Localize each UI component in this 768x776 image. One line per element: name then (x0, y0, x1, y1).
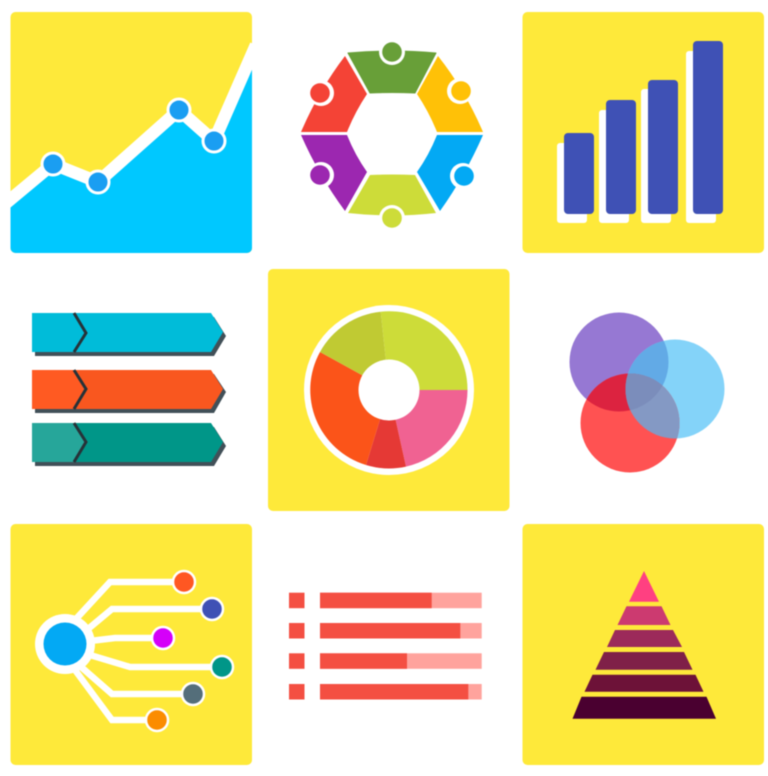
row 3 (289, 653, 482, 669)
overlap: purple and blue (628, 340, 669, 386)
circle: purple (570, 312, 668, 412)
donut slice: olive (320, 312, 389, 390)
panel: donut chart (268, 269, 510, 511)
panel: line and area chart (5, 12, 256, 258)
overlap: all three (626, 374, 662, 410)
panel: three overlapping circles (570, 312, 724, 472)
banner: teal (32, 423, 226, 466)
banner: orange (32, 370, 226, 413)
segment: purple (301, 135, 367, 211)
segment: blue (417, 135, 483, 211)
donut slice: pink (389, 390, 468, 467)
network hub (35, 614, 95, 674)
panel: bar chart (522, 12, 764, 253)
blue area under the line (10, 70, 253, 254)
pyramid layer 2 (618, 606, 670, 625)
segment: green (348, 39, 436, 93)
segment: lime (348, 174, 436, 231)
segment: red (301, 56, 367, 132)
panel: arrow banners (32, 313, 226, 466)
white trend line (5, 45, 256, 204)
network connector lines (75, 582, 222, 720)
network nodes (146, 571, 233, 731)
segment: amber (417, 56, 483, 132)
donut outer ring (304, 305, 474, 475)
panel: hexagonal ring of six segments (301, 39, 483, 231)
donut hole (358, 360, 420, 420)
pyramid layer 1 (629, 571, 659, 602)
row 2 (289, 623, 482, 638)
bar shadows (557, 51, 716, 223)
overlap: blue and red (626, 380, 680, 440)
pyramid layer 3 (607, 630, 682, 647)
donut slice: orange (310, 352, 389, 465)
blue bars (564, 41, 723, 214)
circle: red (580, 374, 680, 472)
row 4 (289, 684, 482, 700)
donut slice: red (366, 390, 406, 468)
overlap: purple and red (586, 373, 630, 412)
pyramid layer 6 (572, 697, 716, 719)
circle: light blue (626, 340, 724, 438)
line chart data points (42, 99, 225, 193)
pyramid layer 4 (596, 652, 692, 670)
panel: pyramid (522, 524, 764, 765)
row 1 (289, 593, 482, 608)
banner: cyan (32, 313, 226, 356)
panel: horizontal progress list (289, 593, 482, 700)
pyramid layer 5 (584, 675, 704, 692)
donut slice: lime (381, 311, 468, 390)
panel: hub and spoke network (10, 524, 252, 765)
